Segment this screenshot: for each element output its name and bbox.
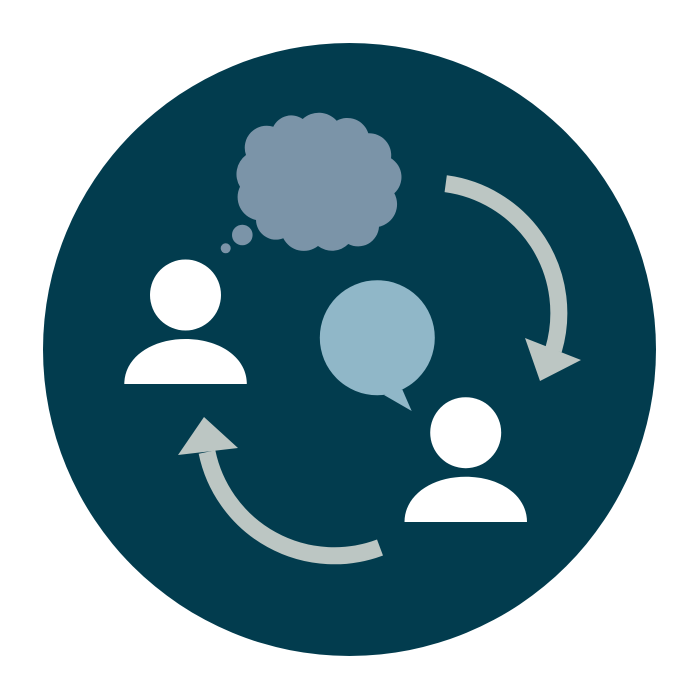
icon: speech bubble [320,280,435,411]
icon: thought bubble large dot [232,225,253,245]
icon: person right [404,397,527,522]
icon: thought cloud [236,113,401,251]
arrow: top right clockwise [446,184,581,381]
icon: thought bubble small dot [221,243,231,253]
icon: person left [124,260,247,384]
background circle [43,43,656,656]
arrow: bottom left clockwise [178,417,380,556]
